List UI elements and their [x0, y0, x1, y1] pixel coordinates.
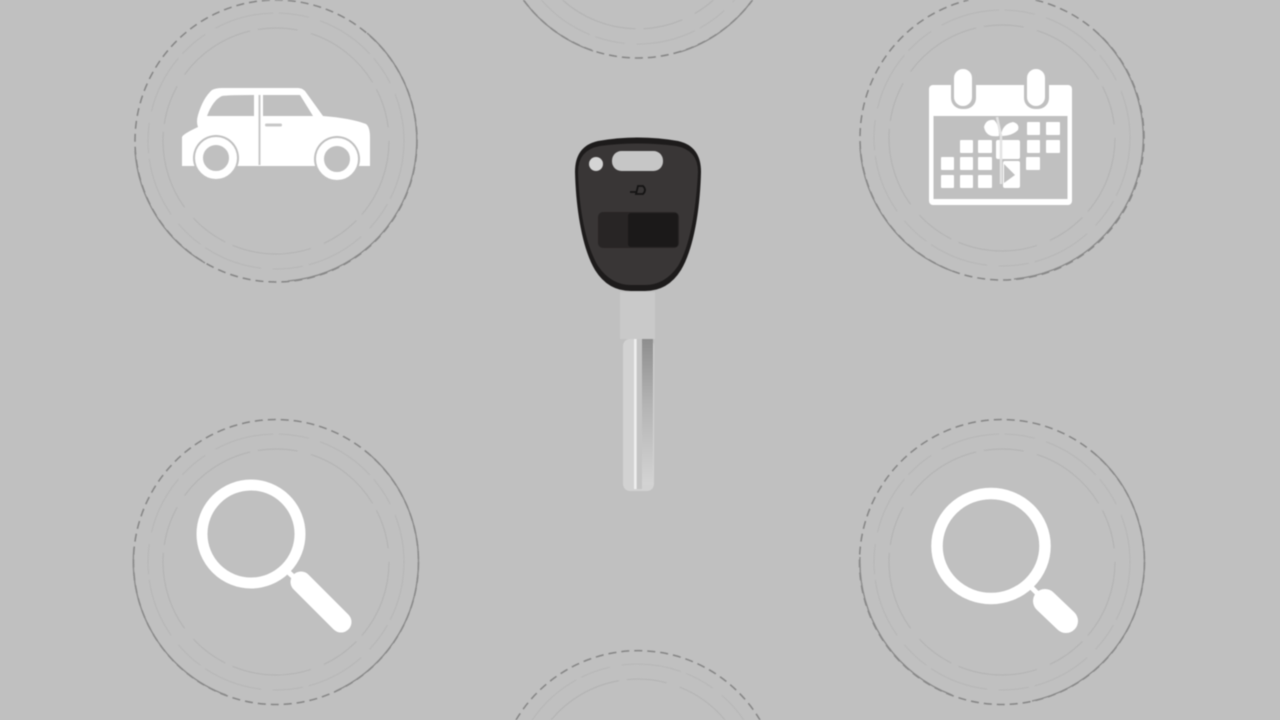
icon: magnifying glass [937, 494, 1066, 621]
panel: car circle [135, 0, 417, 282]
ring: right search circle rings [860, 420, 1144, 704]
key: central car key [575, 138, 701, 491]
icon: car [182, 88, 370, 182]
lock symbol [630, 186, 645, 194]
icon: calendar with gift [929, 67, 1072, 205]
panel: right search circle [860, 420, 1144, 704]
indicator dot [589, 157, 603, 171]
gift ribbon [997, 117, 1001, 184]
calendar day squares [941, 120, 1060, 188]
ring: calendar circle rings [860, 0, 1144, 280]
panel: left search circle [133, 420, 418, 704]
ring: left search circle rings [133, 420, 418, 704]
ring: car circle rings [135, 0, 417, 282]
panel: top partial circle [524, 0, 752, 58]
panel: bottom partial circle [516, 651, 760, 720]
button panel [598, 212, 679, 248]
icon: magnifying glass [202, 485, 341, 622]
key blade [620, 292, 655, 491]
key fob [575, 138, 701, 291]
key ring hole [612, 151, 663, 171]
panel: calendar circle [860, 0, 1144, 280]
